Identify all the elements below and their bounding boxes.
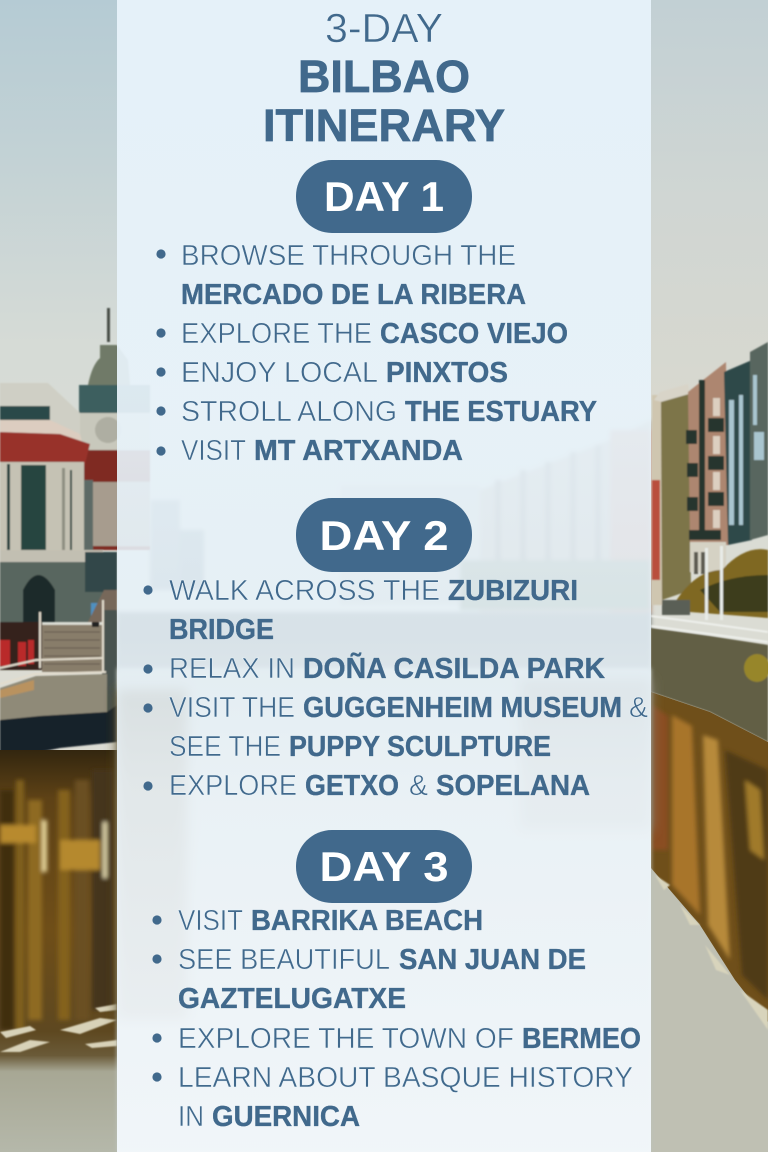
title: BILBAO (298, 51, 470, 102)
day 2 list: EXPLORE (169, 770, 297, 802)
day 3 list: GUERNICA (212, 1101, 360, 1133)
day 2 list: DOÑA CASILDA PARK (303, 651, 605, 685)
day 3 list: EXPLORE THE TOWN OF (178, 1023, 514, 1055)
day 1 list: BROWSE THROUGH THE (181, 240, 516, 272)
day 1 pill: DAY 1 (324, 173, 444, 220)
day 1 pill (296, 160, 472, 233)
day 1 list: MERCADO DE LA RIBERA (181, 279, 526, 311)
day 1 list: CASCO VIEJO (380, 318, 568, 350)
day 2 pill (296, 498, 472, 572)
day 1 list: ENJOY LOCAL (181, 357, 378, 389)
translucent panel (117, 0, 651, 1152)
day 1 list: VISIT (181, 435, 246, 467)
day 3 list: BERMEO (522, 1023, 641, 1055)
day 3 list: GAZTELUGATXE (178, 983, 406, 1015)
day 3 list: VISIT (178, 905, 243, 937)
day 3 list: IN (178, 1101, 204, 1133)
title (263, 5, 505, 151)
day 2 list: RELAX IN (169, 653, 295, 685)
day 2 list: ZUBIZURI (448, 575, 578, 607)
day 1 list: EXPLORE THE (181, 318, 372, 350)
day 2 list: SEE THE (169, 731, 281, 763)
day 2 list: GETXO (305, 770, 399, 802)
day 3 pill: DAY 3 (320, 843, 448, 890)
day 2 list: BRIDGE (169, 614, 274, 646)
day 2 list: VISIT THE (169, 692, 295, 724)
day 2 list (143, 575, 648, 802)
water ripples, left (0, 1004, 117, 1052)
day 1 list (156, 240, 597, 467)
day 3 list: BARRIKA BEACH (251, 905, 483, 937)
day 2 list: & (629, 692, 648, 724)
day 3 pill (296, 830, 472, 903)
day 1 list: THE ESTUARY (405, 396, 597, 428)
day 2 list: WALK ACROSS THE (169, 575, 440, 607)
day 3 list (152, 905, 641, 1133)
day 2 list: & (409, 770, 428, 802)
day 1 list: STROLL ALONG (181, 396, 397, 428)
day 2 pill: DAY 2 (320, 512, 448, 559)
title: ITINERARY (263, 100, 505, 151)
day 3 list: SAN JUAN DE (399, 944, 586, 976)
water ripples, right (655, 875, 768, 1030)
day 3 list: LEARN ABOUT BASQUE HISTORY (178, 1062, 633, 1094)
day 2 list: PUPPY SCULPTURE (289, 731, 551, 763)
day 2 list: GUGGENHEIM MUSEUM (303, 692, 622, 724)
day 2 list: SOPELANA (436, 770, 590, 802)
left water reflection (0, 750, 117, 1152)
left building: market (0, 308, 150, 760)
day 3 list: SEE BEAUTIFUL (178, 944, 390, 976)
right water (651, 692, 768, 1152)
day 1 list: MT ARTXANDA (254, 435, 463, 467)
day 1 list: PINXTOS (386, 357, 508, 389)
central water (117, 668, 651, 1152)
distant buildings behind panel (117, 420, 651, 672)
title: 3-DAY (325, 5, 443, 51)
